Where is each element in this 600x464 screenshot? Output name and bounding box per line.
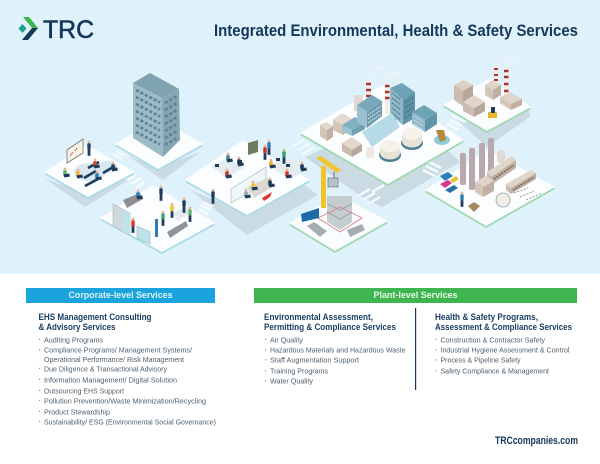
list: health and safety services: · [435, 356, 438, 364]
panel: plant-level services [254, 288, 577, 390]
heading: environmental: Environmental Assessment, [264, 312, 373, 322]
panel: corporate-level services [26, 288, 216, 426]
list: environmental services: Hazardous Materials and Hazardous Waste [270, 346, 406, 355]
list: EHS services: Product Stewardship [44, 407, 110, 416]
heading: EHS management: & Advisory Services [38, 322, 116, 332]
list: EHS services: Sustainability/ ESG (Environmental Social Governance) [44, 417, 216, 426]
platform: construction [289, 195, 388, 253]
platform: tower [115, 118, 203, 171]
logo wordmark: TRC [43, 16, 94, 44]
main plant: stacks, buildings and storage tanks [320, 68, 450, 162]
icon: TRC arrow mark [18, 17, 38, 40]
list: health and safety services: · [435, 346, 438, 354]
background: sky panel [0, 0, 600, 274]
open office: desks, glass meeting room and staff [211, 140, 308, 204]
list: health and safety services: Construction & Contractor Safety [440, 335, 545, 344]
list: EHS services: Compliance Programs/ Management Systems/ [44, 346, 192, 355]
platform: small plant [443, 78, 531, 133]
platform: factory [425, 150, 555, 228]
list: EHS services: Auditing Programs [44, 335, 103, 344]
platform: training room [44, 145, 135, 199]
list: EHS services: · [38, 417, 41, 426]
list: EHS services: · [38, 375, 41, 384]
logo [18, 16, 94, 44]
list: EHS services: · [38, 396, 41, 405]
header bar: plant: Plant-level Services [374, 290, 458, 301]
list: EHS services: Information Management/ Digital Solution [44, 375, 177, 384]
list: environmental services: Staff Augmentation Support [270, 356, 359, 365]
training room: board, presenter and audience [63, 139, 118, 186]
list: EHS services: Operational Performance/ Risk Management [44, 355, 184, 364]
platform: lobby [100, 185, 215, 254]
illustration: isometric campus [44, 59, 555, 254]
list: environmental services: · [264, 335, 267, 344]
heading: health and safety: Assessment & Compliance Services [435, 322, 572, 332]
list: health and safety services: Industrial Hygiene Assessment & Control [440, 346, 570, 355]
list: EHS services: · [38, 364, 41, 373]
list: environmental services: · [264, 366, 267, 376]
list: environmental services: · [264, 346, 267, 354]
heading: environmental: Permitting & Compliance Services [264, 322, 396, 332]
divider [415, 308, 416, 390]
factory: exhaust stacks, process units, containers [440, 138, 542, 212]
platform: main plant [300, 85, 464, 186]
list: EHS services: · [38, 407, 41, 416]
heading: EHS management: EHS Management Consulting [38, 312, 152, 322]
list: environmental services: Training Programs [270, 366, 328, 376]
header bar: corporate: Corporate-level Services [68, 290, 172, 301]
header bar: corporate [26, 288, 215, 303]
list: environmental services: Water Quality [270, 376, 313, 386]
small plant: stacks, buildings and forklift [454, 59, 522, 118]
heading: health and safety: Health & Safety Programs, [435, 312, 538, 322]
construction: crane, scaffolded building and materials [301, 156, 365, 237]
list: health and safety services: Process & Pipeline Safety [440, 356, 521, 365]
list: health and safety services: · [435, 335, 438, 344]
list: health and safety services: Safety Compliance & Management [440, 366, 549, 376]
footer website: TRCcompanies.com [495, 435, 578, 447]
building: corporate tower [133, 73, 180, 157]
list: EHS services: · [38, 335, 41, 344]
platform: open office [185, 140, 310, 217]
header bar: plant [254, 288, 577, 303]
lobby: partitions, benches, desk and people [113, 186, 192, 244]
list: EHS services: · [38, 346, 41, 354]
list: EHS services: Outsourcing EHS Support [44, 386, 124, 395]
list: health and safety services: · [435, 366, 438, 376]
floor shadows [44, 105, 530, 235]
list: environmental services [264, 335, 406, 386]
connecting stairs [113, 116, 465, 214]
list: EHS services: · [38, 386, 41, 395]
list: environmental services: · [264, 376, 267, 386]
list: EHS services: Pollution Prevention/Waste Minimization/Recycling [44, 396, 206, 405]
list: EHS services: Due Diligence & Transactional Advisory [44, 364, 167, 374]
list: environmental services: Air Quality [270, 335, 303, 344]
list: EHS services [38, 335, 216, 426]
list: environmental services: · [264, 356, 267, 364]
list: health and safety services [435, 335, 570, 376]
